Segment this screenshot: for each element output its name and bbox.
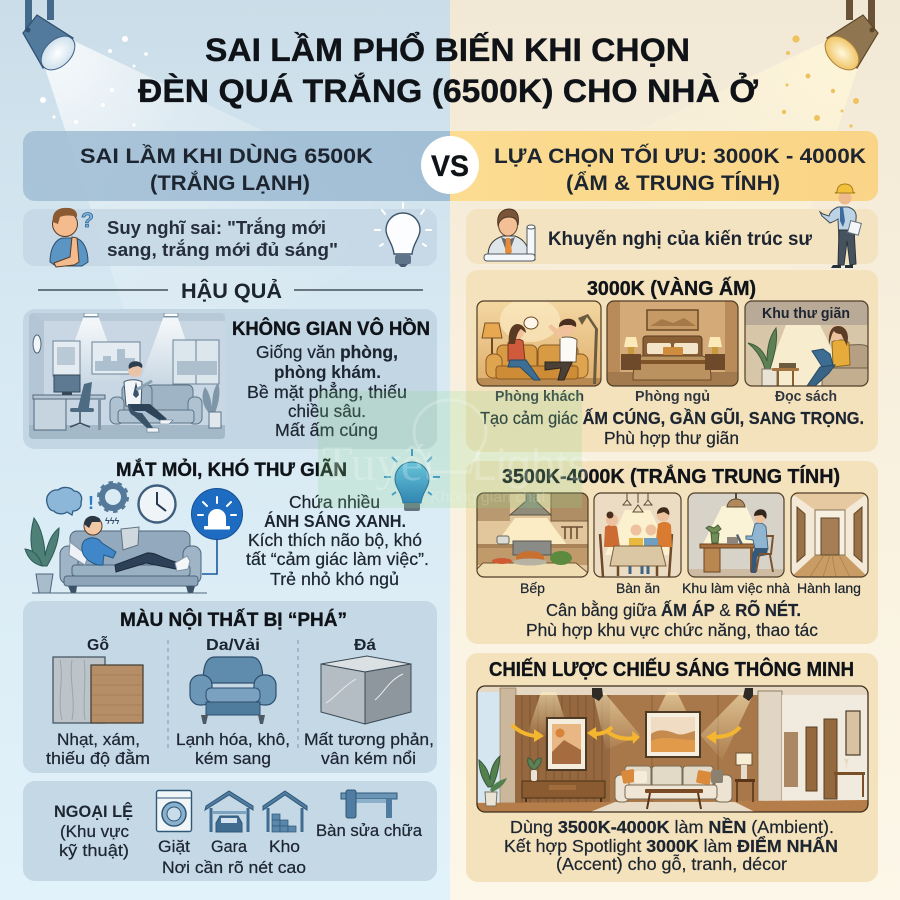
- watermark: Không gian chất: [430, 489, 546, 506]
- heading: interior colors: MÀU NỘI THẤT BỊ “PHÁ”: [120, 609, 347, 631]
- column: wood: thiếu độ đằm: [46, 749, 150, 768]
- arrow: spotlight from right to picture 1: [587, 727, 612, 740]
- text: 3000K room labels: Phòng ngủ: [635, 389, 710, 405]
- light beam: warm spotlight: [460, 40, 858, 390]
- VS badge: VS: [431, 150, 469, 183]
- icon: thinking man: ?: [81, 209, 94, 232]
- text: 3000K room labels: [495, 389, 837, 405]
- column: stone: Mất tương phản,: [304, 730, 434, 749]
- illustration: family at dining table: [598, 494, 674, 576]
- icon: washing machine: [156, 790, 192, 832]
- column: wood: Gỗ: [87, 635, 109, 654]
- panel: smart lighting strategy: [466, 653, 878, 882]
- text: 3500K room labels: Khu làm việc nhà: [682, 581, 791, 596]
- text: soulless space description: [247, 342, 407, 440]
- illustration: home office: [688, 493, 784, 577]
- section: eye strain: [25, 449, 440, 593]
- text: soulless space description: Giống văn phòng,: [256, 342, 398, 362]
- illustration: kitchen: [477, 493, 588, 577]
- title: ĐÈN QUÁ TRẮNG (6500K) CHO NHÀ Ở: [138, 73, 759, 109]
- panel: right header: (ẨM & TRUNG TÍNH): [566, 172, 780, 195]
- icon: cold spotlight: [23, 0, 81, 76]
- text: 3500K description: Phù hợp khu vực chức năng, thao tác: [526, 620, 818, 640]
- text: exceptions label: NGOẠI LỆ: [54, 802, 133, 821]
- illustration: man on sofa with laptop: ϟϟϟ: [105, 516, 120, 526]
- icon: garage: [205, 791, 253, 832]
- panel: exceptions: [23, 781, 437, 881]
- panel: left header: SAI LẦM KHI DÙNG 6500K: [80, 144, 373, 168]
- column: leather fabric: Da/Vải: [206, 637, 260, 654]
- column: leather fabric: [176, 637, 290, 768]
- text: 3000K description: Phù hợp thư giãn: [604, 428, 739, 448]
- text: strategy description: Dùng 3500K-4000K làm NỀN (Ambient).: [510, 816, 834, 837]
- icon: clock: [138, 486, 176, 522]
- text: soulless space description: Mất ấm cúng: [275, 420, 378, 440]
- text: eye strain description: [246, 492, 429, 589]
- text: 3500K room labels: Bếp: [520, 581, 545, 596]
- panel: interior colors destroyed: [23, 601, 437, 773]
- panel: wrong thinking: sang, trắng mới đủ sáng": [107, 239, 338, 260]
- illustration: reading nook: Khu thư giãn: [762, 306, 850, 322]
- column: leather fabric: Lạnh hóa, khô,: [176, 730, 290, 749]
- text: exceptions label: (Khu vực: [60, 823, 129, 841]
- panel: right header: LỰA CHỌN TỐI ƯU: 3000K - 4000K: [494, 144, 866, 168]
- decorative light dots warm: [782, 35, 859, 128]
- text: soulless space description: Bề mặt phẳng, thiếu: [247, 381, 407, 402]
- text: exception labels: Giặt: [158, 838, 190, 856]
- arrow: spotlight from right to picture 2: [706, 727, 740, 744]
- text: strategy description: (Accent) cho gỗ, tranh, décor: [556, 853, 787, 874]
- column: stone: [304, 637, 434, 768]
- heading: soulless space: KHÔNG GIAN VÔ HỒN: [232, 318, 430, 340]
- text: 3500K description: [526, 599, 818, 640]
- text: eye strain description: Kích thích não bộ, khó: [248, 530, 422, 550]
- arrow: spotlight accent to picture 1: [512, 725, 544, 742]
- text: exception labels: Bàn sửa chữa: [316, 822, 423, 840]
- panel: architect recommendation: Khuyến nghị của kiến trúc sư: [548, 229, 812, 250]
- text: strategy description: [504, 816, 838, 874]
- heading: strategy: CHIẾN LƯỢC CHIẾU SÁNG THÔNG MINH: [489, 657, 854, 681]
- illustration: office-like living room: [29, 313, 225, 439]
- text: eye strain description: Chứa nhiều: [289, 492, 380, 512]
- icon: white bulb: [375, 203, 431, 267]
- icon: warehouse: [263, 791, 307, 832]
- text: eye strain description: tất “cảm giác làm việc”.: [246, 549, 429, 569]
- text: exception labels: Kho: [269, 838, 300, 856]
- text: exceptions label: [54, 802, 133, 860]
- panel: right header: [450, 131, 878, 201]
- divider: [297, 640, 299, 752]
- divider: [167, 640, 169, 752]
- illustration: bedroom: [607, 301, 738, 386]
- column: wood: [46, 635, 150, 768]
- background: warm right half: [450, 0, 900, 900]
- text: 3000K description: Tạo cảm giác ẤM CÚNG, GẦN GŨI, SANG TRỌNG.: [480, 407, 864, 428]
- text: eye strain description: ÁNH SÁNG XANH.: [264, 510, 406, 531]
- watermark: Tuyết: [322, 435, 437, 491]
- watermark: [318, 391, 589, 508]
- panel: 3500K-4000K neutral white: [466, 461, 878, 644]
- heading: eye strain: MẮT MỎI, KHÓ THƯ GIÃN: [116, 459, 347, 481]
- title: SAI LẦM PHỔ BIẾN KHI CHỌN: [205, 32, 690, 68]
- text: exception labels: Nơi cần rõ nét cao: [162, 859, 306, 877]
- text: exception labels: Gara: [211, 838, 248, 856]
- text: strategy description: Kết hợp Spotlight 3000K làm ĐIỂM NHẤN: [504, 835, 838, 856]
- panel: left header: (TRẮNG LẠNH): [150, 171, 310, 195]
- panel: left header: [23, 131, 450, 201]
- panel: 3000K warm yellow: [466, 270, 878, 452]
- icon: gear: [98, 482, 128, 512]
- text: eye strain description: Trẻ nhỏ khó ngủ: [270, 569, 399, 589]
- heading: 3500K-4000K: 3500K-4000K (TRẮNG TRUNG TÍNH): [502, 464, 840, 488]
- heading: consequences: HẬU QUẢ: [181, 279, 282, 303]
- icon: architect with blueprint: [484, 209, 535, 261]
- illustration: living room lighting plan: [477, 686, 868, 812]
- icon: plant: [25, 518, 59, 593]
- heading: 3000K: 3000K (VÀNG ẤM): [587, 277, 756, 300]
- text: 3000K room labels: Phòng khách: [495, 389, 584, 405]
- background: cold left half: [0, 0, 450, 900]
- illustration: hallway: [791, 493, 868, 577]
- arrow: spotlight to picture 2: [608, 731, 640, 744]
- icon: workbench: [341, 790, 397, 818]
- illustration: man on sofa with laptop: [32, 516, 207, 593]
- column: wood: Nhạt, xám,: [57, 730, 140, 749]
- text: soulless space description: phòng khám.: [274, 362, 381, 382]
- column: leather fabric: kém sang: [195, 749, 271, 768]
- text: 3000K description: [480, 407, 864, 448]
- icon: blue bulb: [384, 449, 440, 511]
- text: 3000K room labels: Đọc sách: [775, 389, 837, 405]
- column: stone: vân kém nổi: [321, 749, 416, 768]
- text: 3500K room labels: [520, 581, 861, 596]
- panel: architect recommendation: [466, 209, 878, 264]
- icon: exclamation: !: [88, 493, 94, 513]
- text: 3500K room labels: Bàn ăn: [616, 581, 660, 596]
- icon: engineer figure: [820, 184, 861, 268]
- icon: warm spotlight: [819, 0, 878, 76]
- decorative light dots cold: [40, 36, 148, 127]
- panel: soulless space: [23, 309, 437, 449]
- text: exceptions label: kỹ thuật): [59, 842, 129, 860]
- text: exception labels: [158, 822, 423, 877]
- light beam: cold spotlight: [45, 40, 440, 390]
- VS badge: [421, 136, 479, 194]
- text: 3500K room labels: Hành lang: [797, 581, 861, 596]
- column: stone: Đá: [354, 637, 376, 654]
- panel: wrong thinking: [23, 209, 437, 266]
- icon: brain: [47, 487, 82, 515]
- panel: wrong thinking: Suy nghĩ sai: "Trắng mới: [107, 217, 326, 238]
- watermark: Lights: [472, 441, 589, 490]
- text: soulless space description: chiều sâu.: [288, 401, 366, 421]
- icon: blue alarm: [192, 488, 242, 574]
- illustration: reading nook: [745, 301, 868, 386]
- illustration: living room: [477, 298, 601, 386]
- title: [138, 32, 759, 109]
- text: 3500K description: Cân bằng giữa ẤM ÁP & RÕ NÉT.: [546, 599, 801, 620]
- icon: thinking man: [50, 208, 94, 267]
